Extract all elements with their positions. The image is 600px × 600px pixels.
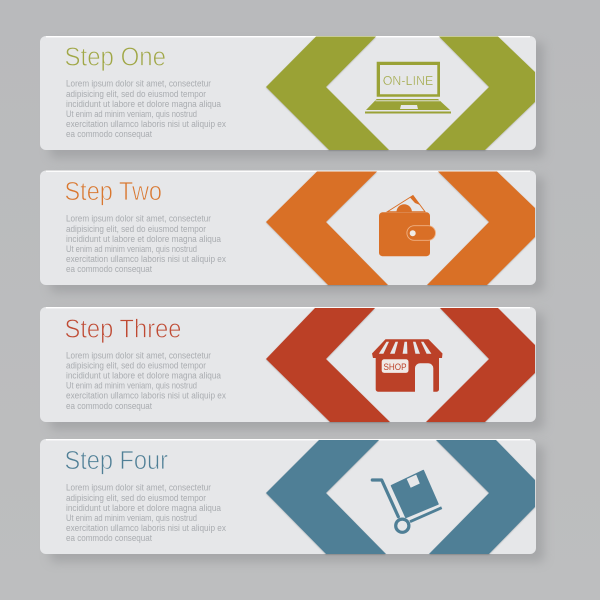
text block: step one: Lorem ipsum dolor sit amet, consectetur (66, 79, 212, 90)
text block: step three: incididunt ut labore et dolore magna aliqua (66, 370, 222, 382)
text block: step two: incididunt ut labore et dolore magna aliqua (66, 234, 222, 245)
text block: step one: exercitation ullamco laboris nisi ut aliquip ex (66, 119, 226, 130)
text block: step three: adipisicing elit, sed do eiusmod tempor (66, 360, 207, 371)
text block: step four: adipisicing elit, sed do eiusmod tempor (66, 493, 207, 504)
panel: step two (40, 170, 544, 292)
text block: step one: incididunt ut labore et dolore magna aliqua (66, 99, 222, 110)
text block: step four: incididunt ut labore et dolore magna aliqua (66, 503, 222, 514)
icon: laptop on-line: ON-LINE (383, 73, 434, 88)
text block: step two: ea commodo consequat (66, 264, 152, 275)
text block: step four: Lorem ipsum dolor sit amet, consectetur (66, 483, 212, 494)
panel: step one (40, 36, 544, 158)
left chevron: step one (266, 36, 389, 150)
right chevron: step one (426, 36, 535, 150)
text block: step two: Ut enim ad minim veniam, quis nostrud (66, 244, 197, 255)
right chevron: step two (427, 172, 535, 285)
left chevron: step three (266, 308, 390, 422)
text block: step four: exercitation ullamco laboris nisi ut aliquip ex (66, 523, 226, 534)
text block: step four: ea commodo consequat (66, 533, 152, 544)
text block: step two: adipisicing elit, sed do eiusmod tempor (66, 224, 207, 235)
text block: step three: exercitation ullamco laboris nisi ut aliquip ex (66, 391, 226, 402)
right chevron: step four (429, 440, 535, 554)
panel: step four (40, 439, 544, 562)
text block: step four (66, 483, 226, 544)
text block: step three: Lorem ipsum dolor sit amet, consectetur (66, 350, 212, 361)
text block: step one: ea commodo consequat (66, 129, 152, 140)
text block: step four: Ut enim ad minim veniam, quis nostrud (66, 513, 197, 524)
text block: step two (66, 214, 226, 275)
right chevron: step three (426, 308, 535, 422)
icon: hand truck with box (372, 470, 442, 532)
heading: step two: Step Two (64, 178, 162, 206)
left chevron: step two (266, 172, 388, 285)
heading: step one: Step One (64, 44, 166, 72)
icon: laptop on-line (365, 62, 451, 114)
left chevron: step four (266, 440, 386, 554)
text block: step one: adipisicing elit, sed do eiusmod tempor (66, 89, 207, 100)
text block: step three: Ut enim ad minim veniam, quis nostrud (66, 381, 197, 392)
text block: step three (66, 350, 226, 412)
text block: step three: ea commodo consequat (66, 401, 152, 412)
icon: wallet (379, 196, 436, 256)
text block: step two: Lorem ipsum dolor sit amet, consectetur (66, 214, 212, 225)
icon: shop (372, 339, 442, 392)
panel: step three (40, 307, 544, 430)
text block: step one (66, 79, 226, 140)
icon: shop: SHOP (384, 362, 406, 372)
heading: step four: Step Four (64, 447, 168, 475)
text block: step two: exercitation ullamco laboris nisi ut aliquip ex (66, 254, 226, 265)
text block: step one: Ut enim ad minim veniam, quis nostrud (66, 109, 197, 120)
heading: step three: Step Three (64, 315, 182, 343)
